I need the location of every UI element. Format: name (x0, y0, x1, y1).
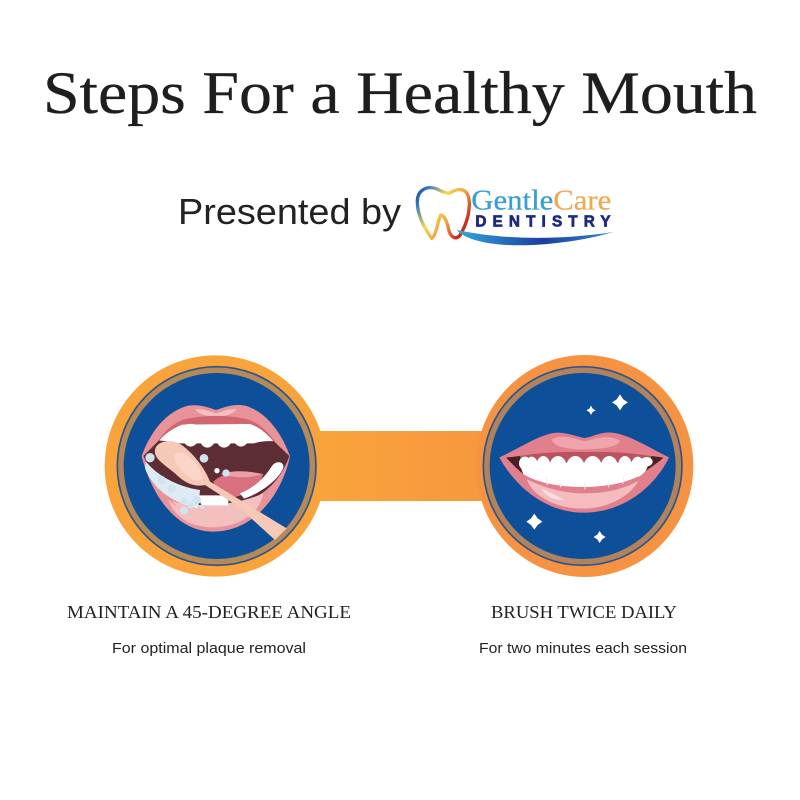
title: Steps For a Healthy Mouth (43, 60, 757, 126)
left step description: For optimal plaque removal (112, 640, 306, 657)
presented by text: Presented by (178, 191, 401, 232)
panel: brushing illustration (105, 355, 326, 577)
upper teeth (159, 424, 273, 448)
right step heading: BRUSH TWICE DAILY (491, 602, 677, 622)
logo tooth icon (417, 188, 469, 238)
connector bar (315, 431, 485, 501)
right step description: For two minutes each session (479, 640, 687, 657)
foam bubbles (145, 453, 230, 515)
circle badge (476, 355, 693, 577)
left step heading: MAINTAIN A 45-DEGREE ANGLE (67, 602, 351, 622)
lower teeth (197, 462, 283, 505)
logo wordmark: GentleCare (471, 186, 611, 217)
circle badge (105, 355, 326, 577)
panel: smile illustration (476, 355, 693, 577)
smiling lips (499, 433, 669, 513)
open mouth (142, 405, 290, 532)
teeth (519, 456, 653, 489)
sparkles (526, 394, 628, 543)
logo swoosh (457, 230, 613, 245)
foam on brush (145, 462, 200, 508)
logo: GentleCare Dentistry (417, 186, 613, 245)
logo subtitle: DENTISTRY (475, 214, 611, 231)
toothbrush (155, 441, 287, 540)
